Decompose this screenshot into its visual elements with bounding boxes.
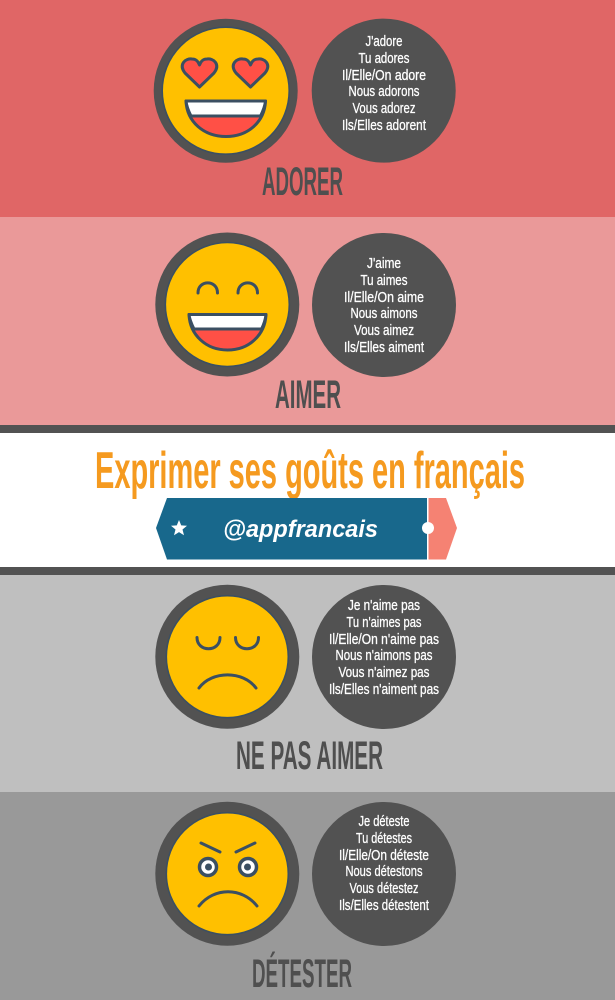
text: adorer conjugation: Tu adores [358,50,410,67]
text: aimer conjugation: J'aime [367,255,401,272]
text: adorer conjugation: Nous adorons [348,83,420,100]
text: aimer conjugation: Il/Elle/On aime [344,289,424,306]
text: detester conjugation: Il/Elle/On déteste [339,847,429,864]
panel: detester [0,792,615,1000]
text: aimer conjugation: Tu aimes [360,272,408,289]
text: adorer conjugation: Il/Elle/On adore [342,67,426,84]
panel: detester: DÉTESTER [252,951,352,996]
text: aimer conjugation: Nous aimons [350,305,418,322]
text: ne pas aimer conjugation: Tu n'aimes pas [346,614,422,631]
heading: aimer: AIMER [275,373,341,417]
text: detester conjugation [312,802,456,946]
text: detester conjugation: Nous détestons [346,863,422,880]
text: detester conjugation: Vous détestez [350,880,418,897]
icon: heart-eyes face [154,19,298,163]
text: ne pas aimer conjugation [312,585,456,729]
panel: aimer [0,217,615,425]
text: adorer conjugation [312,19,456,163]
text: ne pas aimer conjugation: Je n'aime pas [348,597,420,614]
panel: ne pas aimer [0,575,615,792]
panel: adorer: ADORER [262,160,343,204]
text: detester conjugation: Ils/Elles détestent [339,897,430,914]
text: detester conjugation: Je déteste [358,813,410,830]
handle text: @appfrancais [223,516,378,543]
icon: laughing face [155,232,299,376]
text: ne pas aimer conjugation: Vous n'aimez pas [338,664,430,681]
text: ne pas aimer conjugation: Ils/Elles n'aiment pas [329,681,439,698]
ribbon: appfrancais [156,498,457,560]
icon: sad face [155,585,299,729]
text: adorer conjugation: Vous adorez [352,100,416,117]
panel: adorer [0,0,615,217]
panel: title banner [0,425,615,575]
text: adorer conjugation: J'adore [366,33,402,50]
icon: star [171,520,187,535]
text: aimer conjugation: Vous aimez [354,322,414,339]
heading: ne pas aimer: NE PAS AIMER [236,734,383,778]
text: ne pas aimer conjugation: Nous n'aimons pas [336,647,432,664]
icon: angry face [155,802,299,946]
text: aimer conjugation: Ils/Elles aiment [344,339,425,356]
text: adorer conjugation: Ils/Elles adorent [342,117,427,134]
text: detester conjugation: Tu détestes [356,830,412,847]
text: aimer conjugation [312,233,456,377]
text: ne pas aimer conjugation: Il/Elle/On n'aime pas [329,631,439,648]
